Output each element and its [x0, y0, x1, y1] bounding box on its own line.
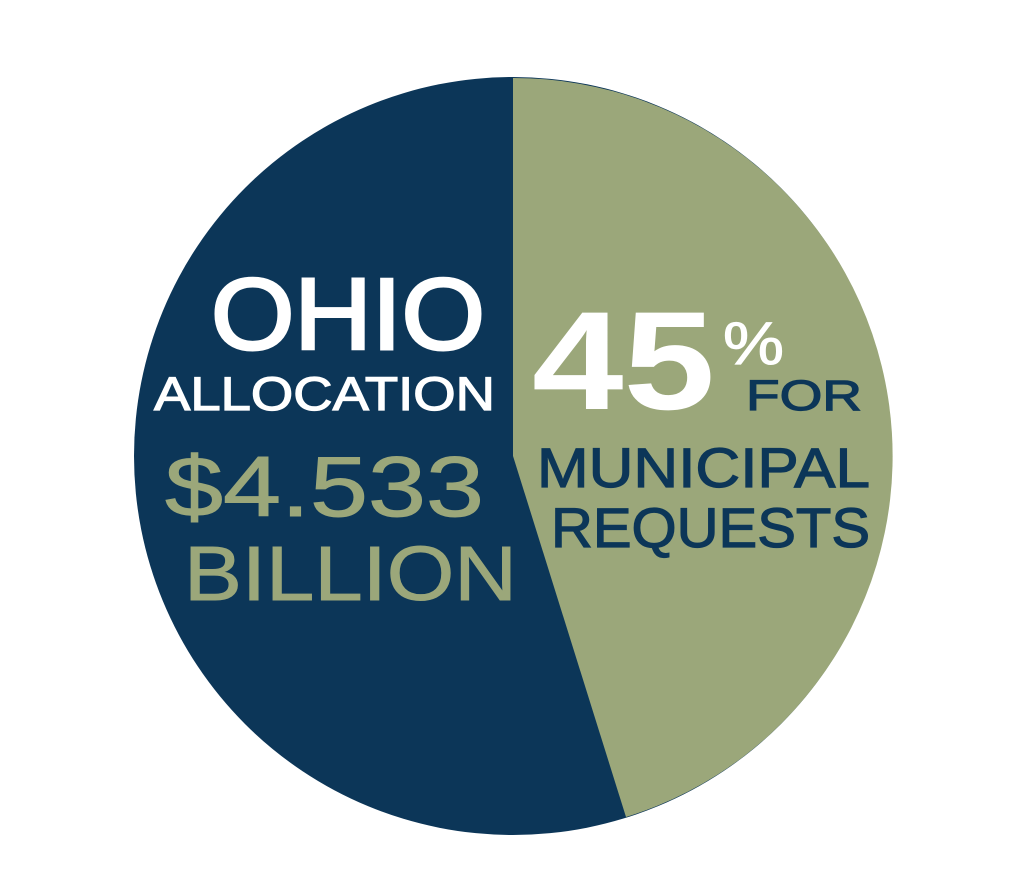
label: for municipal requests: MUNICIPAL — [537, 436, 870, 499]
amount: $4.533 billion — [165, 440, 517, 617]
heading: Ohio allocation: OHIO — [211, 259, 485, 371]
label: for municipal requests: REQUESTS — [551, 496, 870, 559]
pie slice: Ohio allocation remainder — [134, 77, 892, 835]
amount: $4.533 billion: BILLION — [184, 531, 517, 617]
stat: 45 percent: % — [723, 310, 784, 377]
pie slice: 45% municipal requests — [513, 78, 893, 817]
stat: 45 percent: 45 — [532, 282, 715, 439]
amount: $4.533 billion: $4.533 — [165, 440, 484, 535]
label: for municipal requests: FOR — [746, 372, 862, 420]
heading: Ohio allocation: ALLOCATION — [154, 367, 495, 420]
label: for municipal requests — [537, 372, 870, 559]
heading: Ohio allocation — [154, 259, 495, 420]
stat: 45 percent — [532, 282, 784, 439]
